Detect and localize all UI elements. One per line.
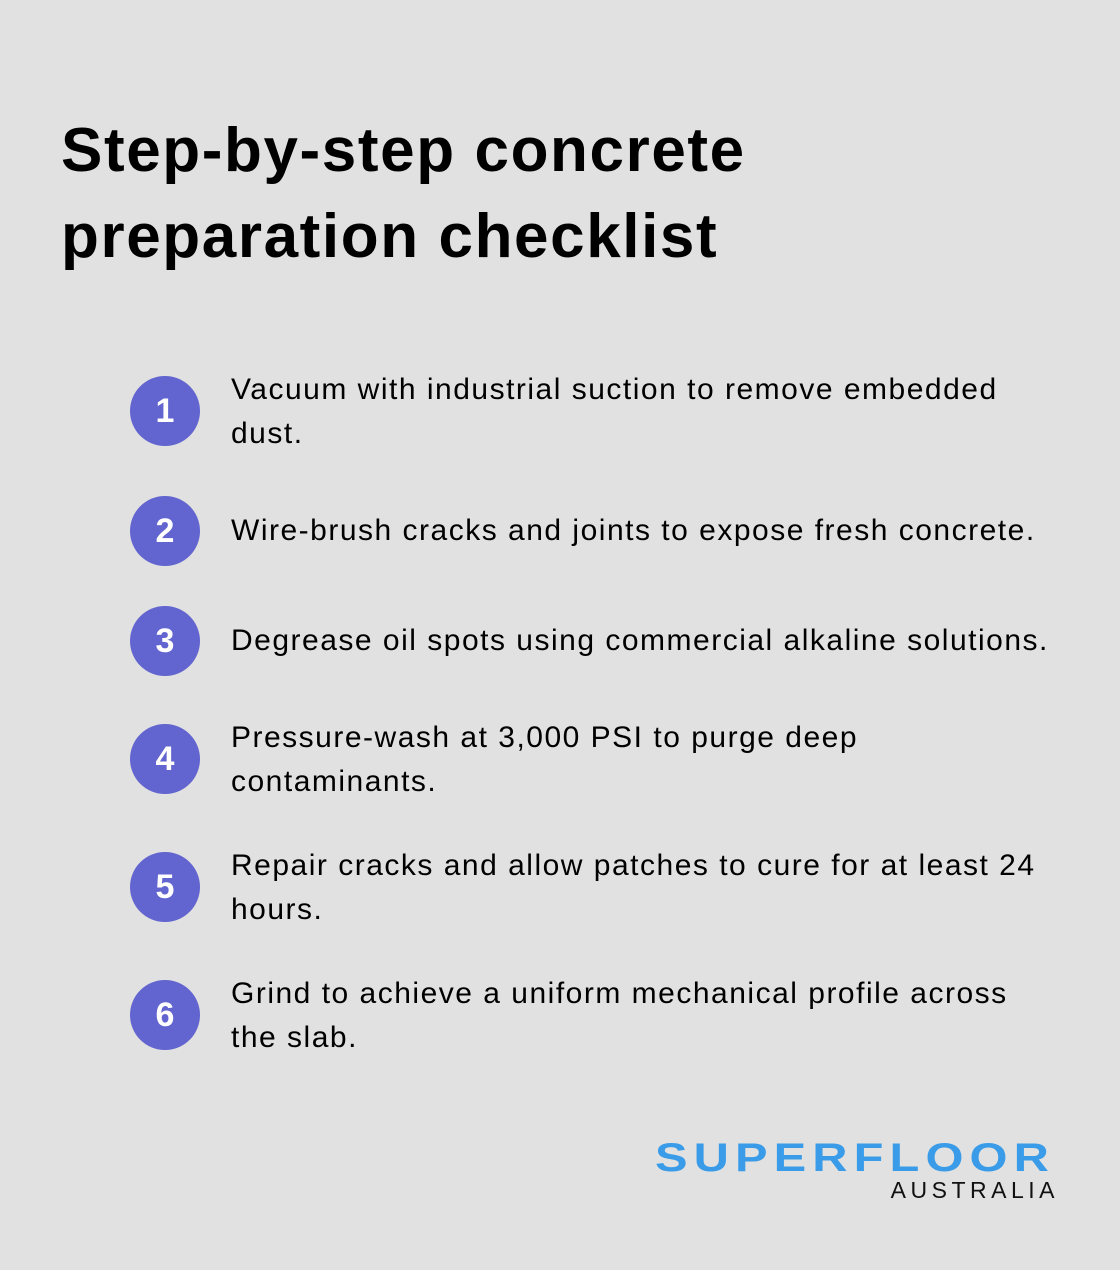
text: 2 [156,512,174,550]
text: Grind to achieve a uniform mechanical profile across [231,977,1008,1010]
text: Wire-brush cracks and joints to expose fresh concrete. [231,514,1036,547]
text: Repair cracks and allow patches to cure for at least 24 [231,849,1036,882]
text: 4 [156,740,174,778]
text: 6 [156,996,174,1034]
text: 5 [156,868,174,906]
text: hours. [231,893,323,926]
text: Vacuum with industrial suction to remove embedded [231,373,998,406]
text: dust. [231,417,304,450]
item 2 [130,496,1036,566]
text: contaminants. [231,765,437,798]
title: Step-by-step concrete [61,116,746,185]
title [61,116,746,271]
title: preparation checklist [61,202,718,271]
text: Pressure-wash at 3,000 PSI to purge deep [231,721,858,754]
text: the slab. [231,1021,358,1054]
text: 3 [156,622,174,660]
item 5 [130,849,1036,926]
item 4 [130,721,858,798]
text: 1 [156,392,174,430]
item 3 [130,606,1049,676]
logo: AUSTRALIA [891,1177,1059,1203]
text: Degrease oil spots using commercial alkaline solutions. [231,624,1049,657]
item 1 [130,373,998,450]
logo: SUPERFLOOR [655,1136,1055,1180]
logo [655,1136,1059,1203]
item 6 [130,977,1008,1054]
